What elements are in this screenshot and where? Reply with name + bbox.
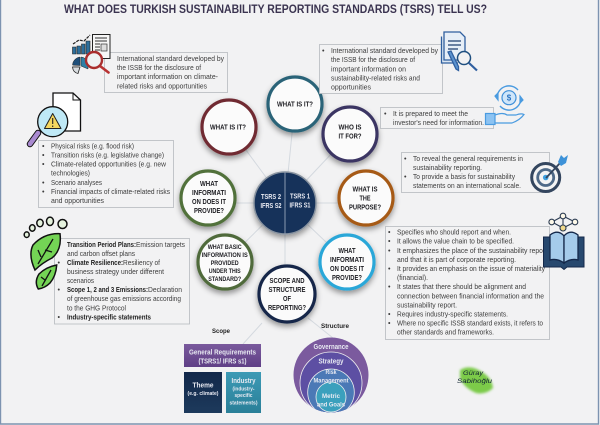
circle: what basic information — [198, 235, 252, 289]
structure diagram: nested circles: Management — [314, 378, 349, 384]
text panel: climate information list: Transition risks (e.g. legislative change) — [51, 150, 164, 160]
hub circle: TSRS 1 and TSRS 2: TSRS 1 — [290, 194, 310, 200]
text panel: basic information list: and carbon offset plans — [67, 249, 135, 258]
text panel: sustainability standard definition: the ISSB for the disclosure of — [331, 55, 415, 64]
text panel: climate information list — [38, 140, 174, 208]
circle: scope and structure of reporting — [259, 266, 315, 322]
circle: what information does it provide (S2): PROVIDE? — [194, 206, 224, 215]
text panel: information provided by S1: It states that there should be alignment and — [397, 282, 526, 291]
text panel: purpose: To reveal the general requirements in — [413, 154, 523, 163]
structure diagram: nested circles: Risk — [326, 369, 337, 376]
text panel: sustainability standard definition — [320, 44, 442, 94]
text panel: basic information list: scenarios — [67, 276, 94, 285]
circle: what basic information: INFORMATION IS — [202, 252, 248, 259]
hub circle: TSRS 1 and TSRS 2: IFRS S2 — [260, 203, 282, 210]
text panel: sustainability standard definition: opportunities — [331, 83, 371, 92]
circle: what basic information: WHAT BASIC — [208, 244, 242, 251]
circle: what information does it provide (S1): PROVIDE? — [332, 273, 362, 282]
circle: what is the purpose: THE — [360, 194, 371, 202]
text panel: information provided by S1: Where no specific ISSB standard exists, it refers to — [397, 319, 543, 328]
circle: what is it (TSRS 1): WHAT IS IT? — [277, 100, 313, 108]
text panel: sustainability standard definition: International standard developed by — [331, 46, 438, 55]
text panel: basic information list: business strategy under different — [67, 267, 164, 276]
block: industry: (industry- — [232, 386, 255, 392]
text panel: basic information list: Transition Period Plans: — [67, 240, 136, 249]
text panel: information provided by S1: connection between financial information and the — [397, 291, 544, 300]
circle: what basic information: STANDARD? — [208, 276, 241, 283]
circle: what information does it provide (S2) — [181, 171, 235, 225]
text panel: basic information list: Scope 1, 2 and 3 Emissions: — [67, 285, 148, 294]
block: industry — [226, 372, 261, 413]
circle: what is it (TSRS 2): WHAT IS IT? — [210, 122, 246, 132]
icon: warning document with magnifier — [30, 93, 80, 144]
text panel: information provided by S1: It provides an emphasis on the issue of materiality — [397, 264, 545, 273]
icon: target with arrow — [532, 155, 568, 192]
signature stamp — [457, 367, 493, 393]
text panel: sustainability standard definition: sustainability-related risks and — [331, 74, 420, 82]
text panel: climate standard definition: International standard developed by — [117, 54, 224, 63]
text panel: purpose — [402, 152, 550, 192]
hub circle: TSRS 1 and TSRS 2: TSRS 2 — [261, 194, 281, 201]
text panel: basic information list: • — [58, 312, 60, 321]
circle: what is it (TSRS 2) — [202, 100, 256, 154]
text panel: information provided by S1: • — [388, 237, 391, 246]
text panel: basic information list — [54, 238, 190, 324]
scope diagram: requirements blocks — [184, 344, 261, 413]
text panel: information provided by S1: • — [388, 264, 391, 273]
text panel: climate information list: • — [42, 178, 45, 187]
text panel: who it is for: It is prepared to meet the — [393, 109, 468, 118]
text panel: climate standard definition: important information on climate- — [117, 72, 219, 81]
icon: hand holding dollar coin — [486, 86, 524, 124]
text panel: basic information list: to the GHG Protocol — [67, 303, 126, 312]
text panel: information provided by S1: Requires industry-specific statements. — [397, 310, 508, 318]
block: theme: (e.g. climate) — [188, 391, 219, 397]
text panel: climate information list: • — [42, 160, 45, 168]
text panel: purpose: • — [404, 172, 407, 181]
block: industry: Industry — [232, 376, 256, 385]
text panel: climate information list: • — [42, 187, 45, 196]
connector lines from hub to topic circles — [208, 104, 366, 344]
text panel: purpose: To provide a basis for sustainability — [413, 172, 515, 181]
circle: what is the purpose — [339, 171, 393, 225]
circle: what information does it provide (S2): WHAT — [200, 179, 219, 188]
text panel: climate information list: Climate-related opportunities (e.g. new — [51, 160, 167, 168]
block: theme: Theme — [192, 380, 214, 390]
circle: what information does it provide (S1): ON DOES IT — [330, 264, 364, 273]
circle: who is it for: IT FOR? — [338, 132, 362, 141]
circle: what information does it provide (S2): INFORMATI — [192, 188, 226, 197]
signature stamp: Güray — [463, 370, 484, 377]
text panel: sustainability standard definition: • — [322, 46, 325, 55]
text panel: information provided by S1: sustainability report. — [397, 300, 457, 309]
text panel: who it is for — [380, 108, 494, 128]
text panel: basic information list: Industry-specific statements — [67, 312, 151, 321]
label: structure: Structure — [321, 323, 349, 330]
text panel: purpose: sustainability reporting. — [413, 163, 482, 172]
block: general requirements — [184, 344, 261, 367]
title: WHAT DOES TURKISH SUSTAINABILITY REPORTING STANDARDS (TSRS) TELL US? — [64, 3, 487, 16]
structure diagram: nested circles: Strategy — [318, 358, 344, 366]
circle: what basic information: PROVIDED — [211, 260, 239, 267]
text panel: climate information list: • — [42, 142, 45, 150]
circle: what is the purpose: PURPOSE? — [349, 202, 381, 212]
signature stamp: Sabihoğlu — [457, 378, 492, 385]
circle: what information does it provide (S1): INFORMATI — [330, 255, 364, 264]
text panel: information provided by S1 — [386, 226, 550, 340]
circle: what is it (TSRS 1) — [268, 77, 322, 131]
hub circle: TSRS 1 and TSRS 2: IFRS S1 — [290, 202, 311, 210]
label: scope: Scope — [212, 328, 230, 335]
block: industry: statements) — [230, 400, 258, 406]
text panel: who it is for: • — [384, 109, 387, 118]
text panel: climate information list: Financial impacts of climate-related risks — [51, 187, 170, 196]
text panel: climate information list: Scenario analyses — [51, 178, 102, 187]
circle: scope and structure of reporting: REPORTING? — [268, 303, 306, 312]
circle: what information does it provide (S2): ON DOES IT — [192, 197, 226, 206]
text panel: information provided by S1: • — [388, 310, 391, 318]
text panel: information provided by S1: (financial). — [397, 273, 428, 282]
text panel: information provided by S1: It emphasizes the place of the sustainability report — [397, 246, 547, 255]
text panel: climate information list: • — [42, 150, 45, 160]
circle: scope and structure of reporting: STRUCTURE — [268, 285, 306, 294]
structure diagram: nested circles — [294, 338, 368, 416]
text panel: information provided by S1: other standards and frameworks. — [397, 328, 494, 337]
text panel: who it is for: investor's need for information. — [393, 118, 484, 127]
text panel: basic information list: Declaration — [148, 285, 182, 294]
structure diagram: nested circles: Governance — [314, 344, 349, 351]
text panel: information provided by S1: • — [388, 282, 391, 291]
text panel: basic information list: Emission targets — [136, 240, 185, 249]
text panel: information provided by S1: It allows the value chain to be specified. — [397, 237, 514, 246]
circle: who is it for — [323, 107, 377, 161]
circle: who is it for: WHO IS — [338, 123, 362, 132]
block: theme — [184, 372, 222, 413]
structure diagram: nested circles: Metric — [322, 393, 340, 400]
text panel: basic information list: Climate Resilience: — [67, 258, 123, 267]
text panel: climate information list: technologies) — [51, 169, 90, 178]
structure diagram: nested circles: and Goals — [317, 402, 345, 408]
text panel: climate information list: Physical risks (e.g. flood risk) — [51, 142, 134, 150]
text panel: purpose: statements on an international scale. — [413, 181, 521, 190]
text panel: climate standard definition — [104, 52, 228, 92]
text panel: basic information list: • — [58, 258, 60, 267]
text panel: basic information list: • — [58, 285, 60, 294]
text panel: climate standard definition: the ISSB for the disclosure of — [117, 63, 201, 72]
block: industry: specific — [234, 393, 253, 399]
text panel: climate standard definition: related risks and opportunities — [117, 81, 207, 90]
circle: what information does it provide (S1): WHAT — [338, 246, 356, 255]
icon: open book with network — [544, 213, 584, 270]
circle: scope and structure of reporting: OF — [283, 294, 291, 303]
text panel: information provided by S1: • — [388, 246, 391, 255]
text panel: basic information list: Resiliency of — [123, 258, 160, 267]
icon: document with pen and magnifier — [442, 32, 477, 70]
icon: hand holding dollar coin: $ — [507, 94, 512, 103]
text panel: basic information list: of greenhouse gas emissions according — [67, 294, 181, 303]
text panel: information provided by S1: Specifies who should report and when. — [397, 228, 511, 237]
icon: green footprint with leaves — [24, 217, 67, 289]
text panel: information provided by S1: • — [388, 319, 391, 328]
circle: what is the purpose: WHAT IS — [352, 184, 378, 194]
text panel: climate information list: and opportunities — [51, 196, 104, 205]
text panel: information provided by S1: • — [388, 228, 391, 237]
text panel: sustainability standard definition: important information on — [331, 64, 406, 73]
text panel: information provided by S1: and that it is part of corporate reporting. — [397, 255, 516, 264]
block: general requirements: (TSRS1/ IFRS s1) — [198, 358, 246, 366]
icon: chart and magnifier — [72, 34, 110, 74]
hub circle: TSRS 1 and TSRS 2 — [254, 172, 316, 234]
block: general requirements: General Requirements — [189, 350, 256, 356]
circle: what basic information: UNDER THIS — [209, 268, 241, 275]
circle: what information does it provide (S1) — [320, 235, 374, 289]
circle: scope and structure of reporting: SCOPE AND — [270, 276, 304, 285]
text panel: purpose: • — [404, 154, 407, 163]
